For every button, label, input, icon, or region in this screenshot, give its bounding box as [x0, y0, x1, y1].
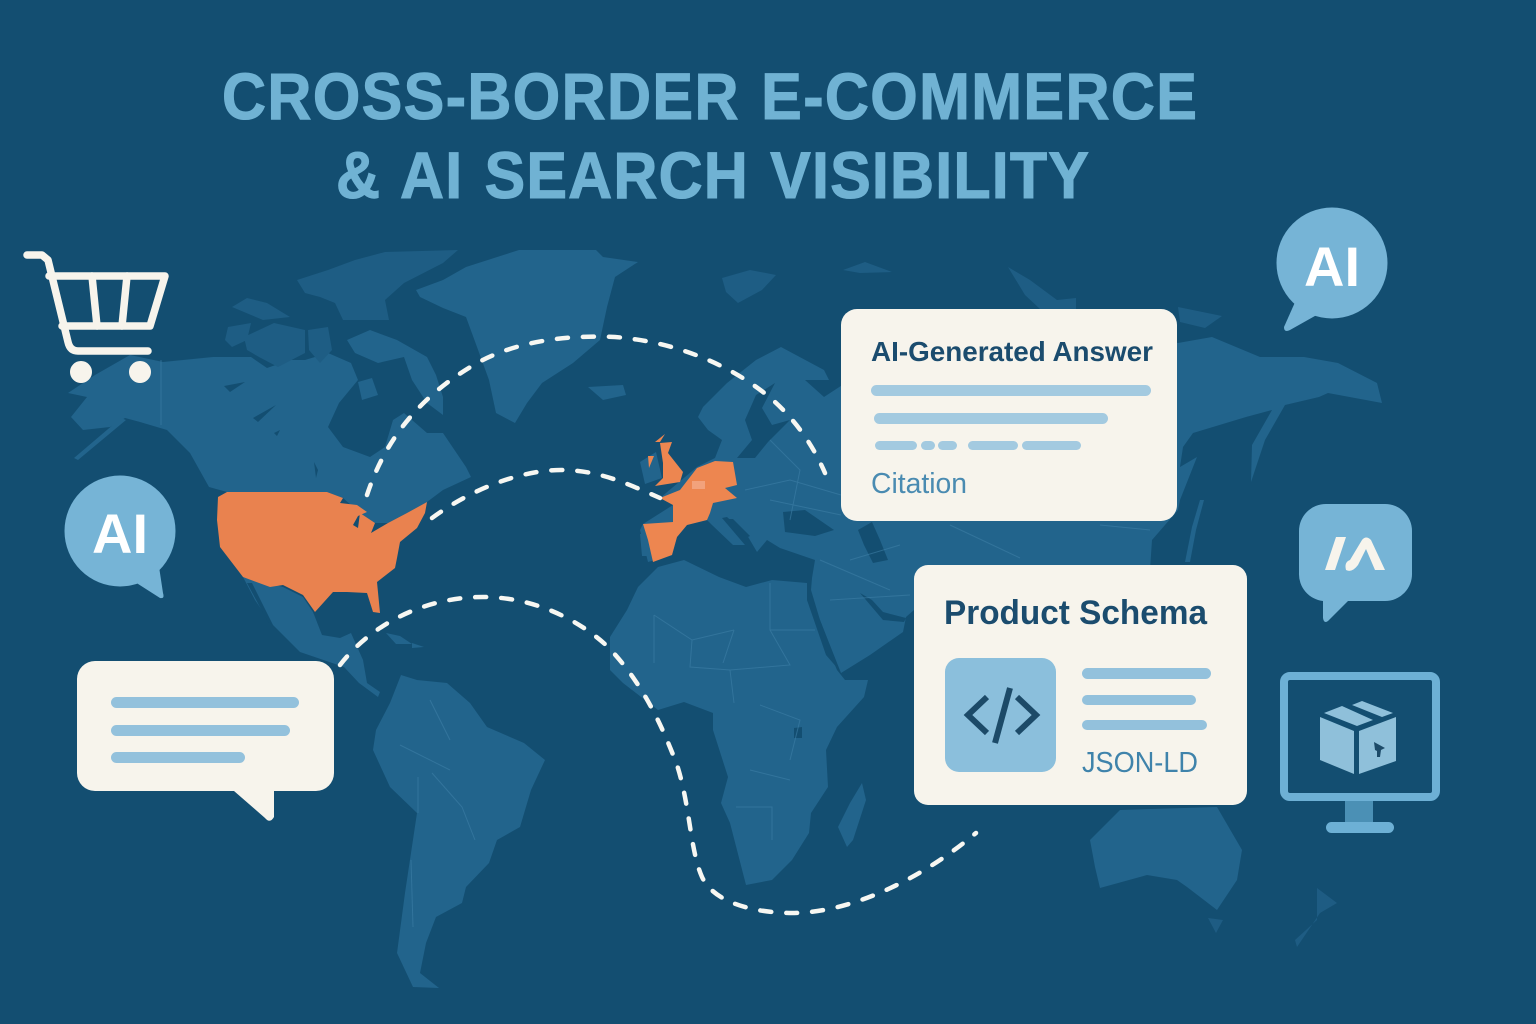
lake: Victoria	[794, 727, 802, 738]
map: Madagascar	[838, 783, 866, 847]
map: Greenland	[416, 250, 638, 423]
lakes: northern Canada	[224, 382, 318, 478]
highlighted region: United States	[217, 492, 427, 613]
map: Baffin Island	[347, 330, 443, 415]
package box	[1320, 701, 1396, 774]
map: South America	[373, 675, 545, 988]
JSON-LD label: JSON-LD	[1082, 747, 1198, 779]
inland seas	[224, 382, 906, 738]
sea: Persian Gulf	[860, 593, 906, 622]
map: Svalbard and Arctic Russia islands	[722, 262, 1222, 328]
map: Iceland	[588, 385, 626, 400]
France, Germany and Iberia	[643, 461, 737, 562]
sea: Black Sea	[783, 510, 834, 536]
chat lines	[111, 697, 299, 763]
monitor base	[1326, 822, 1394, 833]
sea: Red Sea	[807, 600, 839, 670]
map: New Zealand	[1295, 888, 1337, 947]
United Kingdom	[655, 434, 683, 486]
map: Ireland	[640, 452, 662, 484]
dashed route: North America to Europe	[432, 470, 660, 518]
monitor stand	[1345, 800, 1373, 824]
sea: Adriatic and Aegean	[728, 519, 750, 538]
map: Tasmania	[1208, 918, 1223, 933]
monitor screen	[1284, 676, 1436, 797]
Ireland	[648, 456, 654, 468]
icon: code tile	[945, 658, 1056, 772]
heading: Product Schema: Product Schema	[944, 594, 1208, 632]
map: Southampton Island	[358, 378, 378, 400]
sea: Caspian	[858, 522, 888, 563]
world map	[68, 250, 1382, 988]
sea: Gulf of California	[247, 583, 273, 625]
map: Mexico and Central America	[243, 577, 380, 697]
icon: AI speech bubble left	[64, 476, 176, 598]
map: Africa	[610, 560, 868, 885]
icon: AI speech bubble right	[1276, 208, 1388, 331]
heading: AI-Generated Answer: AI-Generated Answer	[871, 336, 1153, 367]
icon: monitor with package	[1284, 676, 1436, 833]
panel: product schema	[914, 565, 1247, 805]
map: Portugal edge	[640, 534, 650, 556]
map: Eurasia	[640, 312, 1382, 673]
bubble glyph	[1325, 537, 1385, 571]
map: Caribbean islands	[386, 633, 424, 648]
panel: AI-generated answer	[841, 309, 1177, 521]
title	[222, 61, 1197, 213]
package arrow mark	[1374, 742, 1385, 757]
dashed route: North America to AI answer	[367, 337, 825, 495]
icon: AI speech bubble right: AI	[1304, 235, 1360, 298]
icon: AI speech bubble left: AI	[92, 502, 148, 565]
icon: shopping cart	[27, 255, 165, 380]
highlighted region: Western Europe	[643, 434, 737, 562]
map: Japan	[1185, 500, 1204, 562]
map: Arctic islands	[225, 250, 458, 367]
dashed route: chat bubble to product schema	[340, 597, 976, 913]
map: Alaska peninsula	[74, 418, 126, 460]
sea: Baltic	[737, 383, 790, 458]
panel: chat bubble	[77, 661, 334, 821]
icon: square AI chat bubble	[1299, 504, 1412, 622]
map: North America	[68, 353, 471, 523]
citation label: Citation	[871, 468, 967, 500]
map: Australia	[1090, 807, 1242, 910]
Paris highlight	[692, 481, 705, 489]
schema lines	[1082, 668, 1211, 730]
title line 2: & AI SEARCH VISIBILITY	[336, 140, 1089, 213]
country borders	[161, 360, 1150, 927]
title line 1: CROSS-BORDER E-COMMERCE	[222, 61, 1197, 134]
answer text lines	[871, 385, 1151, 450]
